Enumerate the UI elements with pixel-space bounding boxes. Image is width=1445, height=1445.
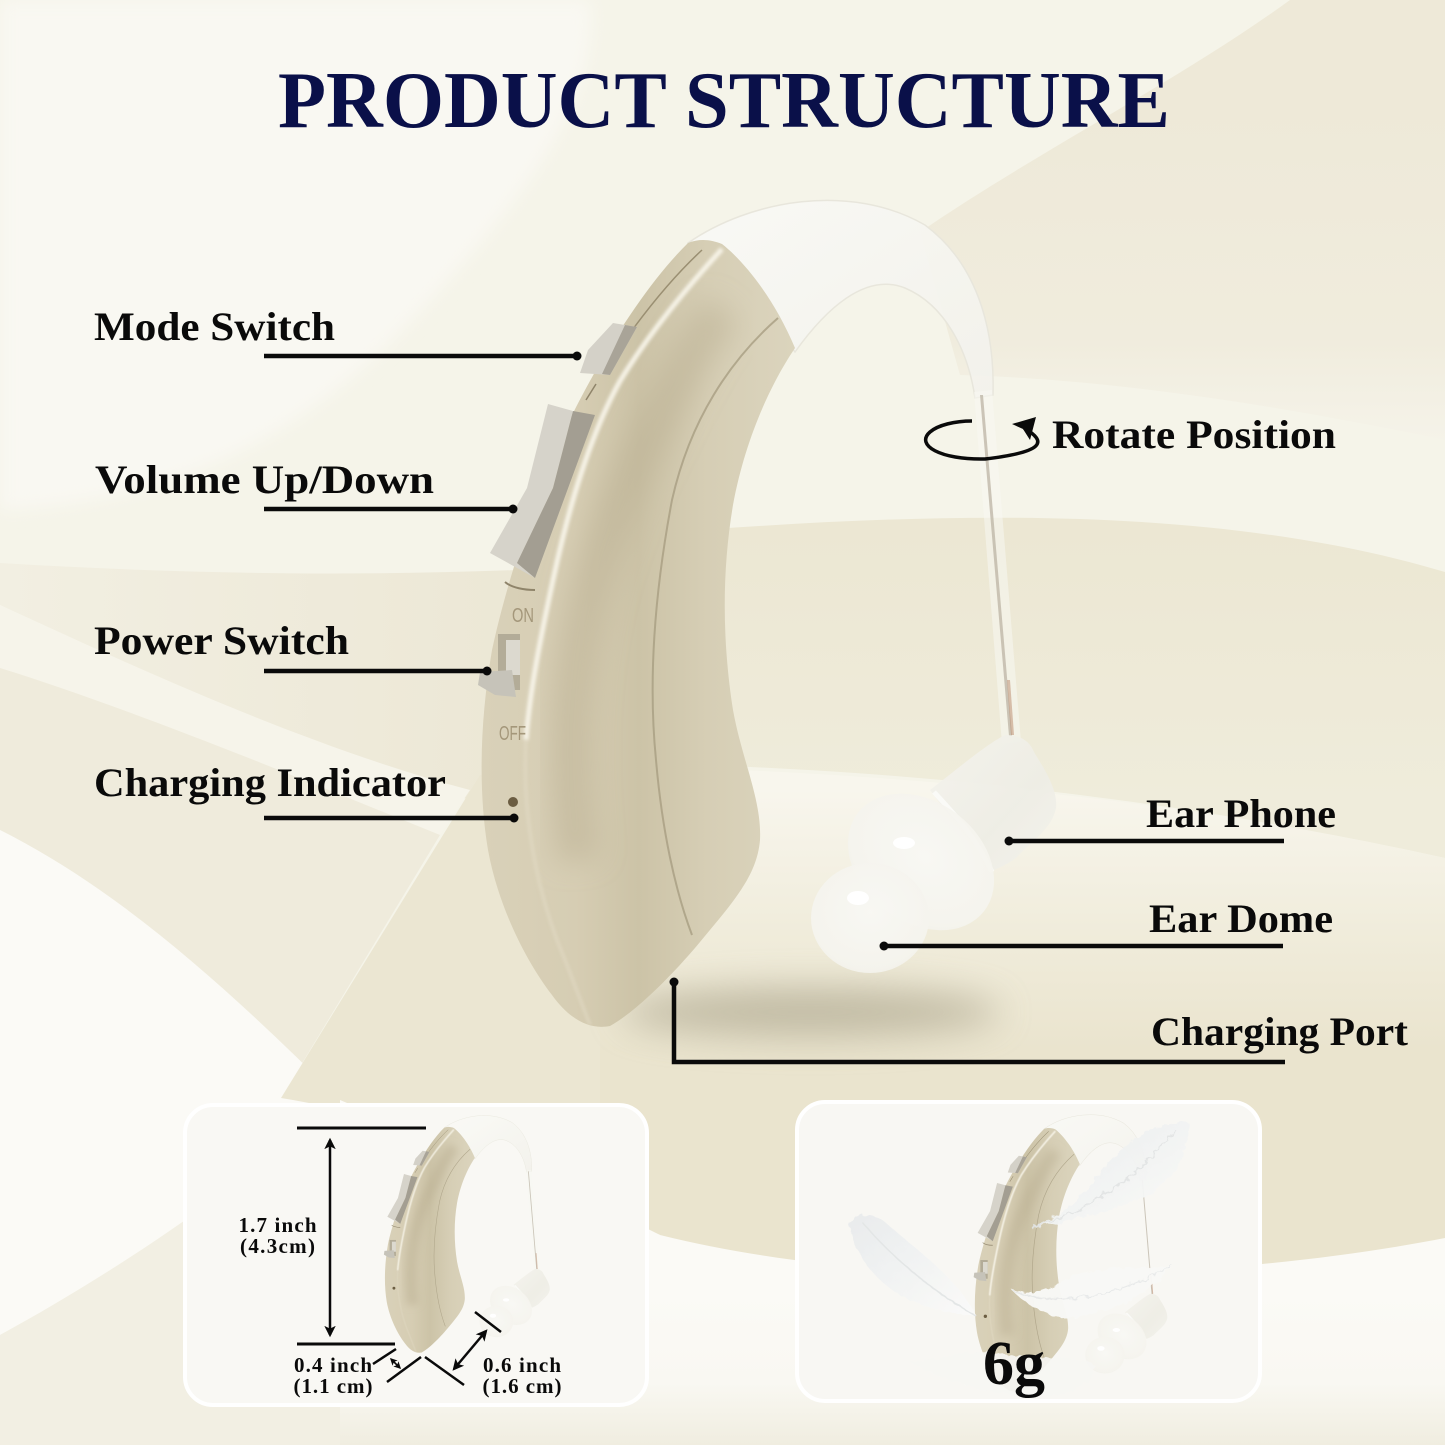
callout: volume up/down xyxy=(95,457,518,514)
small hearing aid xyxy=(384,1116,550,1353)
callout: charging indicator: Charging Indicator xyxy=(94,760,446,805)
callout: mode switch: Mode Switch xyxy=(94,304,335,349)
feather upper right xyxy=(1032,1122,1188,1228)
panel: weight xyxy=(797,1102,1260,1401)
width dimension xyxy=(294,1349,421,1398)
feather middle right xyxy=(1010,1265,1172,1318)
callout: power switch: Power Switch xyxy=(94,618,349,663)
callout: charging port xyxy=(670,978,1409,1062)
callout: ear dome: Ear Dome xyxy=(1149,896,1333,941)
width dimension: (1.1 cm) xyxy=(294,1374,372,1398)
feather bottom xyxy=(908,1352,1095,1396)
hearing aid main product xyxy=(478,200,1056,1027)
feather left xyxy=(850,1215,976,1316)
depth dimension xyxy=(425,1312,562,1398)
panel: dimensions xyxy=(185,1105,647,1405)
title: PRODUCT STRUCTURE xyxy=(278,57,1170,145)
depth dimension: 0.6 inch xyxy=(483,1353,561,1377)
height dimension: 1.7 inch xyxy=(238,1213,317,1237)
callout: charging indicator xyxy=(94,760,518,822)
small hearing aid xyxy=(974,1115,1167,1392)
callout: volume up/down: Volume Up/Down xyxy=(95,457,434,502)
height dimension xyxy=(238,1128,426,1344)
callout: rotate position: Rotate Position xyxy=(1052,412,1336,457)
callout: ear phone: Ear Phone xyxy=(1146,791,1336,836)
callout: mode switch xyxy=(94,304,582,360)
on label: ON xyxy=(512,605,534,627)
height dimension: (4.3cm) xyxy=(240,1234,315,1258)
off label: OFF xyxy=(499,723,526,745)
weight value: 6g xyxy=(983,1330,1045,1398)
width dimension: 0.4 inch xyxy=(294,1353,372,1377)
callout: rotate position xyxy=(926,412,1336,459)
callout: charging port: Charging Port xyxy=(1151,1009,1409,1054)
callout: ear dome xyxy=(880,896,1333,950)
callout: power switch xyxy=(94,618,492,676)
depth dimension: (1.6 cm) xyxy=(482,1374,562,1398)
callout: ear phone xyxy=(1004,791,1336,846)
shadow under hearing aid xyxy=(620,988,1000,1036)
